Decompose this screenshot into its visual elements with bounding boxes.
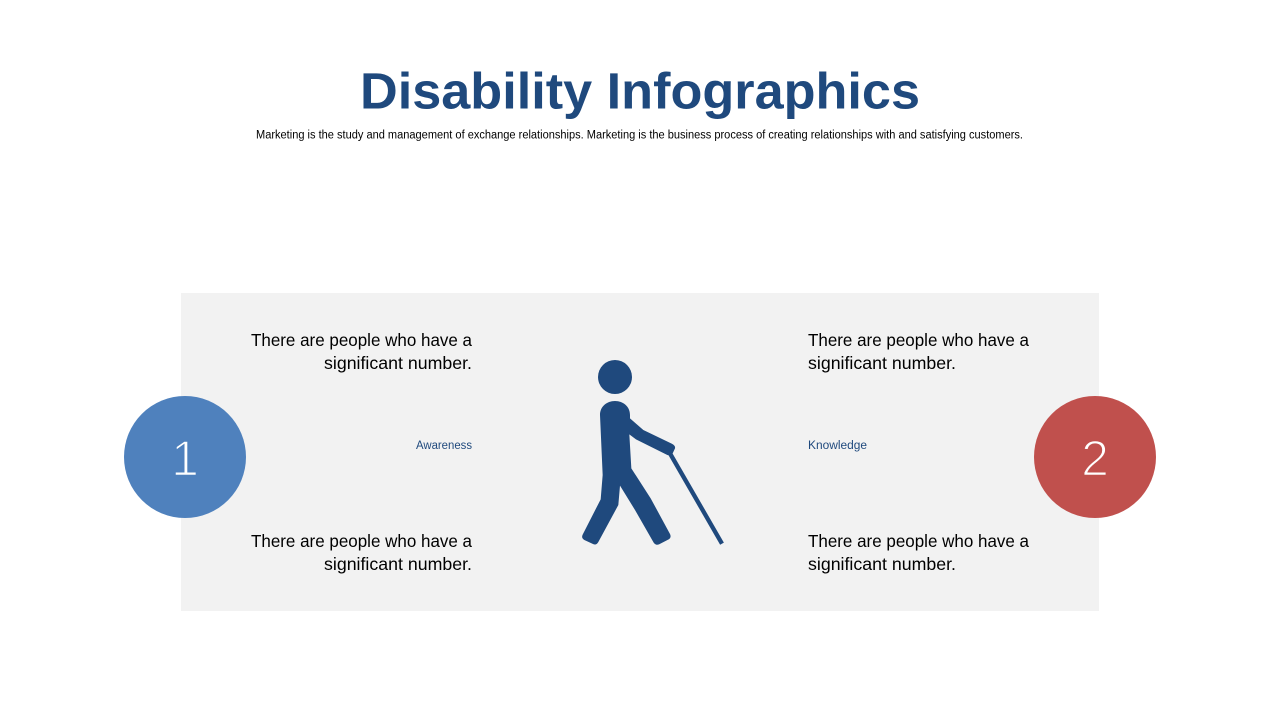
title: Disability Infographics <box>360 62 920 120</box>
text block: bottom right: significant number. <box>808 554 956 574</box>
badge: number 2 <box>1034 396 1156 518</box>
badge: number 1 <box>124 396 246 518</box>
text block: top right: There are people who have a <box>808 330 1029 350</box>
badge: number 1: 1 <box>171 430 199 486</box>
text block: top right <box>808 330 1029 373</box>
text block: bottom left: significant number. <box>324 554 472 574</box>
text block: bottom right: There are people who have a <box>808 531 1029 551</box>
text block: top left: significant number. <box>324 353 472 373</box>
label: Knowledge: Knowledge <box>808 440 867 452</box>
text block: top right: significant number. <box>808 353 956 373</box>
text block: bottom right <box>808 531 1029 574</box>
text block: top left <box>251 330 472 373</box>
badge: number 2: 2 <box>1081 430 1109 486</box>
subtitle: Marketing is the study and management of exchange relationships. Marketing is the business process of creating relationships with and satisfying customers. <box>256 130 1023 142</box>
icon: person walking with cane <box>582 360 722 545</box>
text block: top left: There are people who have a <box>251 330 472 350</box>
text block: bottom left: There are people who have a <box>251 531 472 551</box>
panel: background <box>181 293 1099 611</box>
text block: bottom left <box>251 531 472 574</box>
label: Awareness: Awareness <box>416 440 472 452</box>
